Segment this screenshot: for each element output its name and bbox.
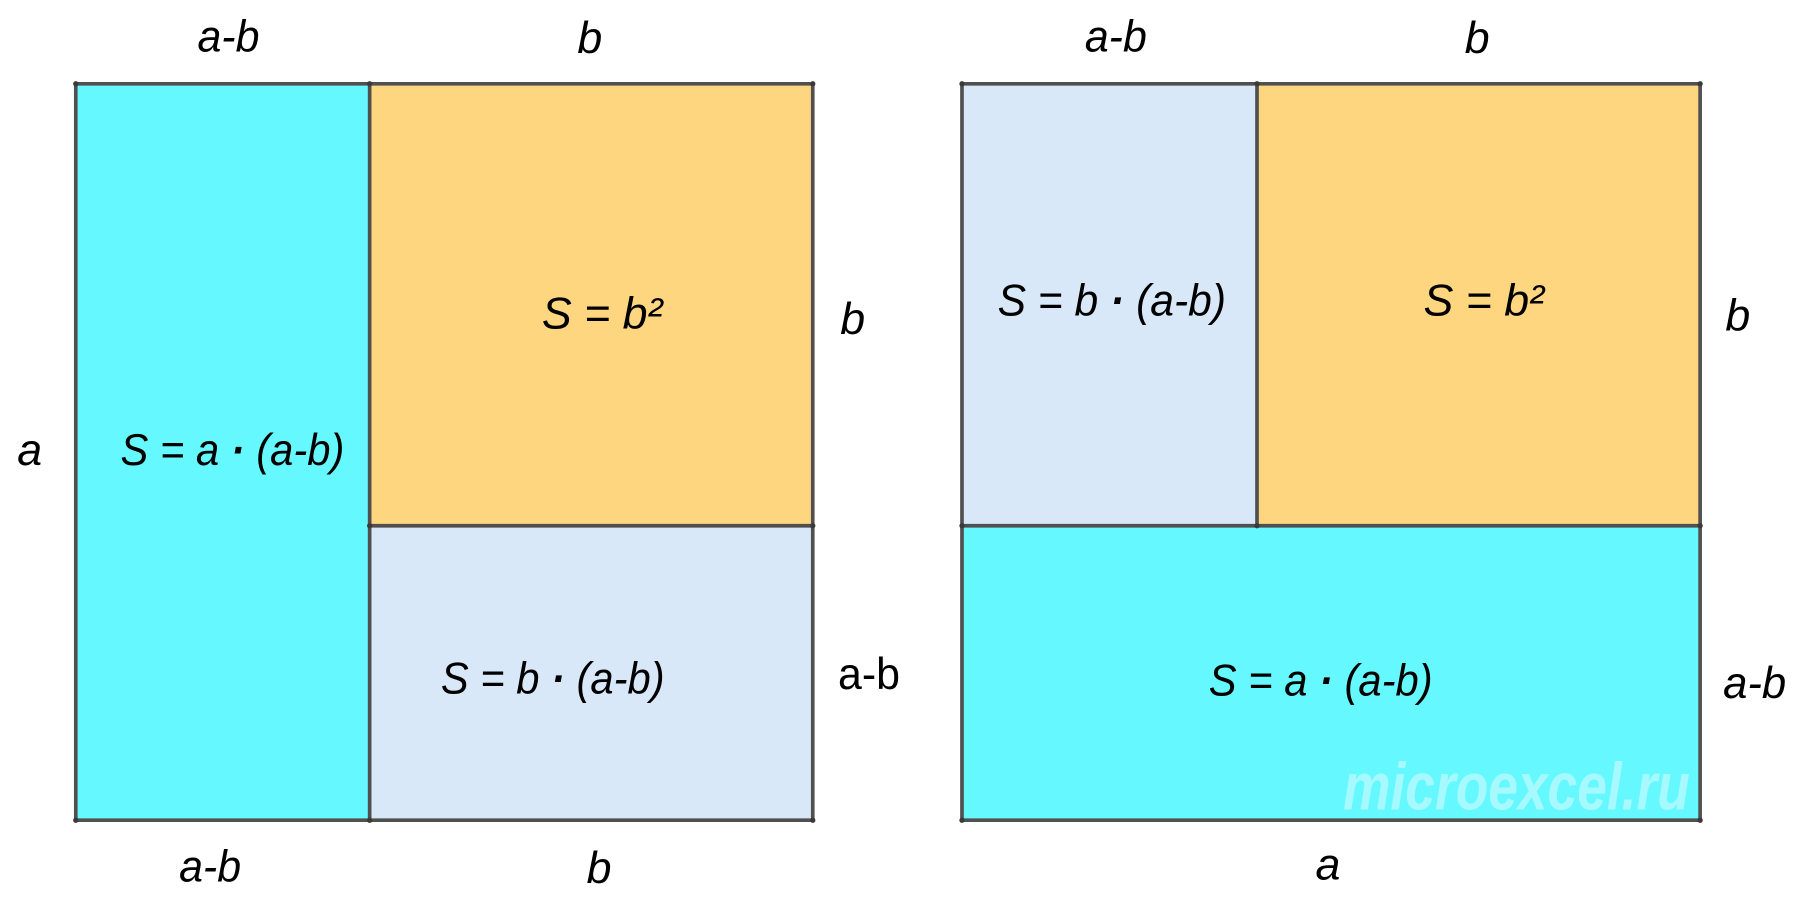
panel: orange square b squared — [1257, 84, 1700, 526]
label: top a-b: a-b — [197, 12, 259, 62]
label: bottom a-b: a-b — [179, 842, 241, 892]
panel: light blue rectangle b(a-b) — [370, 526, 813, 820]
label: top b: b — [577, 13, 602, 63]
label: top b: b — [1465, 13, 1490, 63]
label: bottom b: b — [587, 843, 612, 893]
watermark: microexcel.ru — [1343, 750, 1690, 824]
right diagram — [962, 12, 1786, 889]
vertex dots — [962, 84, 1700, 820]
panel: light blue rectangle b(a-b) — [962, 84, 1257, 526]
formula: S = b · (a-b): S = b · (a-b) — [998, 276, 1226, 326]
diagram outlines — [962, 84, 1700, 820]
label: right b: b — [1725, 291, 1750, 341]
panel: orange square b squared — [370, 84, 813, 526]
label: right b: b — [840, 294, 865, 344]
formula: S = b · (a-b): S = b · (a-b) — [441, 653, 665, 703]
panel: cyan rectangle a(a-b) — [76, 84, 370, 820]
vertex dots — [76, 84, 813, 820]
label: top a-b: a-b — [1085, 12, 1147, 62]
formula: S = b²: S = b² — [542, 288, 664, 338]
formula: S = a · (a-b): S = a · (a-b) — [1209, 656, 1433, 706]
left diagram — [17, 12, 900, 893]
label: right a-b: a-b — [838, 649, 900, 699]
diagram outlines — [76, 84, 813, 820]
label: left a: a — [17, 425, 42, 475]
panel: cyan rectangle a(a-b) — [962, 526, 1700, 820]
label: bottom a: a — [1316, 839, 1340, 889]
label: right a-b: a-b — [1723, 658, 1786, 708]
formula: S = b²: S = b² — [1423, 276, 1546, 326]
formula: S = a · (a-b): S = a · (a-b) — [121, 425, 344, 475]
